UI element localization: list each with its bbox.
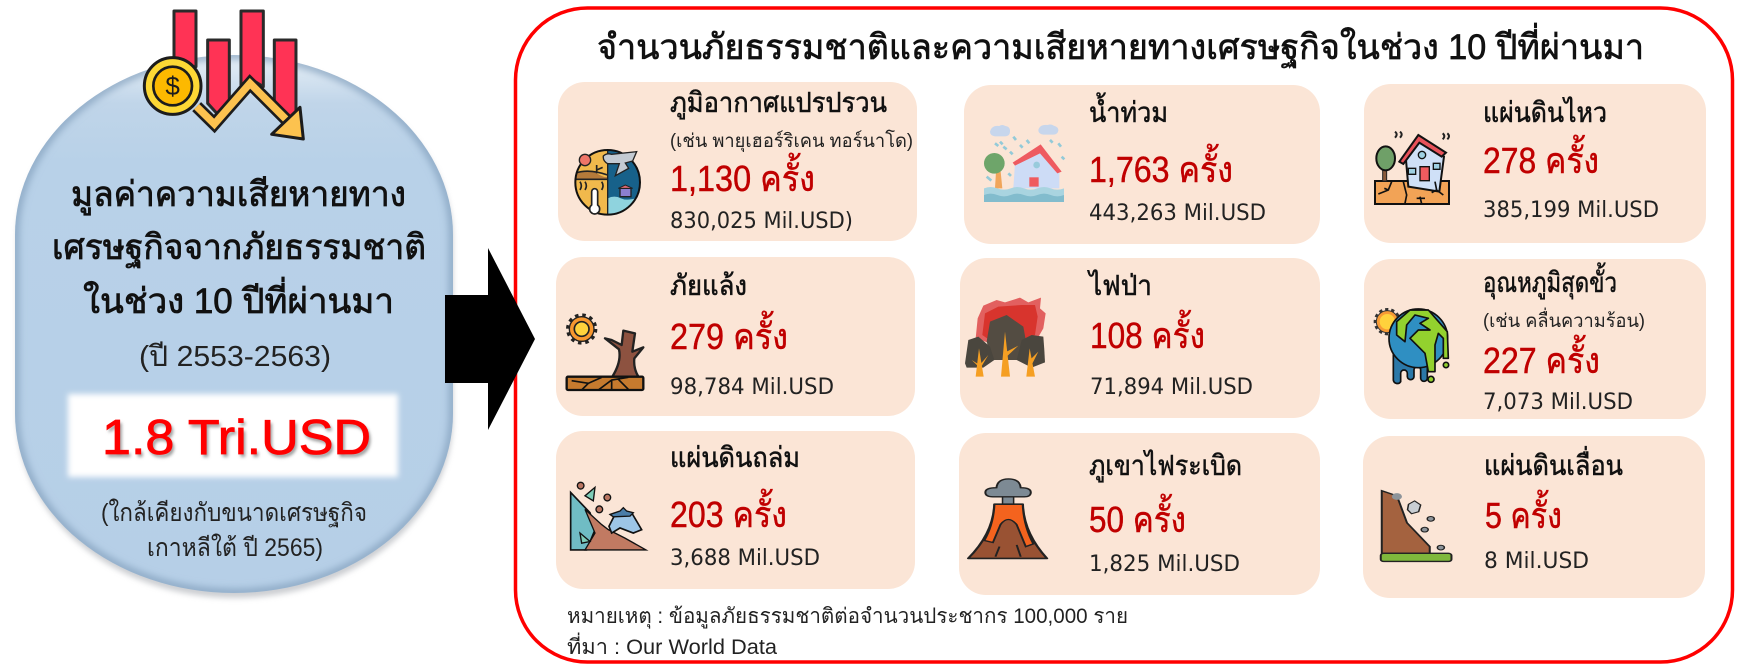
- heading: total loss: ในช่วง 10 ปีที่ผ่านมา: [83, 277, 394, 321]
- card: extreme temperature: [1364, 259, 1706, 419]
- label: แผ่นดินไหว: [1483, 97, 1607, 128]
- count: 5 ครั้ง: [1485, 489, 1562, 536]
- footnote: หมายเหตุ : ข้อมูลภัยธรรมชาติต่อจำนวนประชากร 100,000 ราย: [567, 605, 1128, 629]
- icon: wildfire: [965, 298, 1046, 377]
- examples: (เช่น คลื่นความร้อน): [1483, 307, 1645, 332]
- label: ไฟป่า: [1087, 270, 1152, 301]
- count: 227 ครั้ง: [1483, 334, 1600, 381]
- icon: drought: [567, 316, 643, 390]
- label: แผ่นดินเลื่อน: [1484, 446, 1623, 481]
- comparison note: (ใกล้เคียงกับขนาดเศรษฐกิจ: [101, 498, 367, 527]
- icon: melting earth: [1376, 309, 1449, 383]
- icon: volcano: [968, 479, 1047, 558]
- loss: 443,263 Mil.USD: [1089, 201, 1266, 226]
- count: 203 ครั้ง: [670, 488, 787, 535]
- loss: 98,784 Mil.USD: [670, 375, 834, 400]
- loss: 7,073 Mil.USD: [1483, 390, 1633, 415]
- card: flood: [964, 85, 1320, 244]
- value box: 1.8 Tri.USD: [104, 414, 373, 468]
- period: (ปี 2553-2563): [139, 341, 331, 373]
- loss: 830,025 Mil.USD): [670, 209, 853, 234]
- card: volcano: [959, 433, 1320, 595]
- heading: total loss: เศรษฐกิจจากภัยธรรมชาติ: [52, 228, 426, 268]
- count: 1,763 ครั้ง: [1089, 143, 1233, 190]
- loss: 3,688 Mil.USD: [670, 546, 820, 571]
- value box: 1.8 Tri.USD: [102, 411, 371, 465]
- card: landslide: [1363, 436, 1705, 598]
- card: climate change: [558, 82, 917, 241]
- label: อุณหภูมิสุดขั้ว: [1483, 262, 1617, 300]
- panel: disasters frame: [516, 8, 1732, 662]
- count: 50 ครั้ง: [1089, 493, 1186, 540]
- label: น้ำท่วม: [1089, 92, 1168, 128]
- icon: climate globe: [575, 150, 641, 215]
- card: wildfire: [960, 258, 1320, 418]
- count: 1,130 ครั้ง: [670, 152, 815, 199]
- count: 108 ครั้ง: [1090, 309, 1205, 356]
- comparison note: [101, 498, 367, 562]
- count: 279 ครั้ง: [670, 310, 788, 357]
- card: mudslide: [556, 431, 915, 589]
- icon: falling chart with coin: [144, 11, 303, 139]
- label: ภัยแล้ง: [670, 270, 747, 301]
- examples: (เช่น พายุเฮอร์ริเคน ทอร์นาโด): [670, 129, 913, 153]
- icon: earthquake: [1375, 132, 1449, 204]
- icon: mudslide: [571, 482, 646, 550]
- card: earthquake: [1364, 84, 1706, 243]
- heading: total loss: [52, 175, 426, 321]
- icon: rockfall: [1381, 491, 1451, 561]
- panel: total economic loss: [15, 11, 453, 598]
- arrow: [445, 248, 535, 430]
- loss: 8 Mil.USD: [1484, 549, 1589, 574]
- footnote: [567, 605, 1128, 659]
- count: 278 ครั้ง: [1483, 134, 1599, 181]
- title: จำนวนภัยธรรมชาติและความเสียหายทางเศรษฐกิจในช่วง 10 ปีที่ผ่านมา: [597, 23, 1644, 68]
- blob shadow: [17, 60, 453, 598]
- comparison note: เกาหลีใต้ ปี 2565): [147, 533, 323, 562]
- label: ภูมิอากาศแปรปรวน: [670, 87, 887, 120]
- value box: [68, 394, 398, 477]
- footnote: ที่มา : Our World Data: [567, 632, 777, 659]
- loss: 71,894 Mil.USD: [1090, 375, 1253, 400]
- blob body: [15, 55, 453, 593]
- label: ภูเขาไฟระเบิด: [1089, 450, 1242, 483]
- icon: flood: [984, 124, 1064, 202]
- loss: 1,825 Mil.USD: [1089, 552, 1240, 577]
- card: drought: [556, 257, 915, 416]
- label: แผ่นดินถล่ม: [670, 442, 800, 473]
- heading: total loss: มูลค่าความเสียหายทาง: [71, 175, 406, 215]
- loss: 385,199 Mil.USD: [1483, 198, 1659, 223]
- icon: falling chart with coin: $: [165, 71, 180, 101]
